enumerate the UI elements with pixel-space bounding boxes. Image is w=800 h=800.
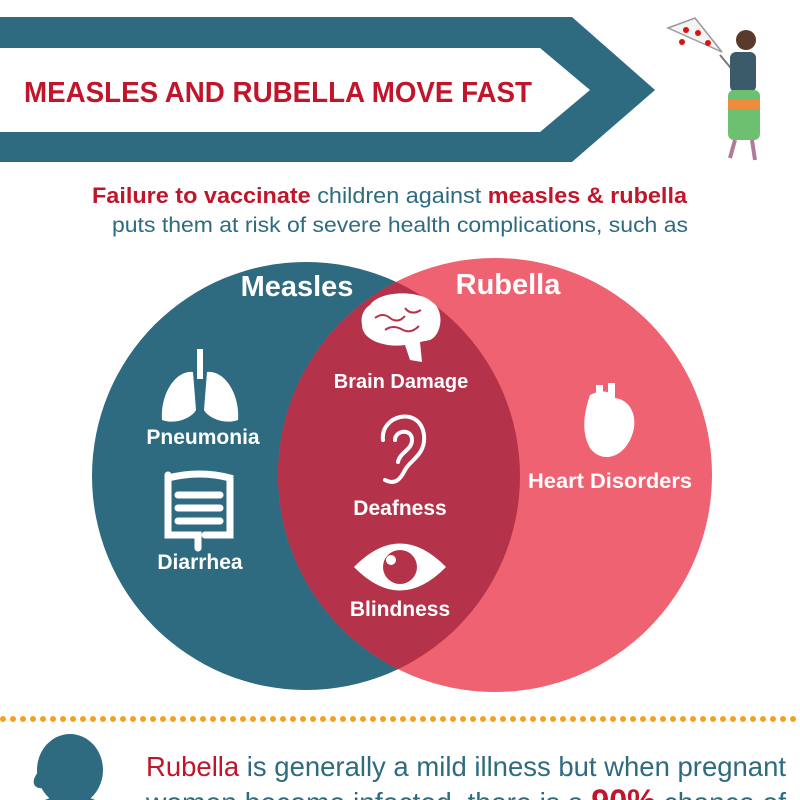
icon: eye — [354, 544, 446, 590]
overlap — [278, 282, 520, 670]
text: rubella note: Rubella is generally a mild illness but when pregnant — [146, 751, 786, 782]
icon: heart — [584, 383, 634, 457]
circle: measles — [92, 262, 520, 690]
text: deafness: Deafness — [353, 497, 447, 520]
text: heart disorders: Heart Disorders — [528, 470, 692, 493]
banner: arrow — [0, 17, 655, 162]
icon: intestine — [168, 474, 230, 548]
illustration: girl with butterfly net — [668, 18, 760, 160]
subtitle — [92, 183, 688, 237]
subtitle: Failure to vaccinate children against measles & rubella — [92, 183, 688, 208]
circle: rubella — [278, 258, 712, 692]
venn diagram — [92, 258, 712, 692]
text: pneumonia: Pneumonia — [146, 426, 260, 449]
subtitle: puts them at risk of severe health complications, such as — [112, 214, 688, 237]
icon: ear — [383, 416, 424, 482]
label: rubella: Rubella — [456, 269, 561, 301]
label: measles: Measles — [241, 271, 353, 303]
title: MEASLES AND RUBELLA MOVE FAST — [24, 77, 532, 109]
text: blindness: Blindness — [350, 598, 450, 621]
icon: lungs — [162, 349, 238, 422]
divider: dotted line — [3, 716, 800, 722]
text: diarrhea: Diarrhea — [157, 551, 243, 574]
icon: brain — [362, 293, 440, 362]
text: rubella note — [145, 751, 786, 800]
icon: woman — [32, 734, 108, 800]
text: brain damage: Brain Damage — [334, 371, 468, 393]
